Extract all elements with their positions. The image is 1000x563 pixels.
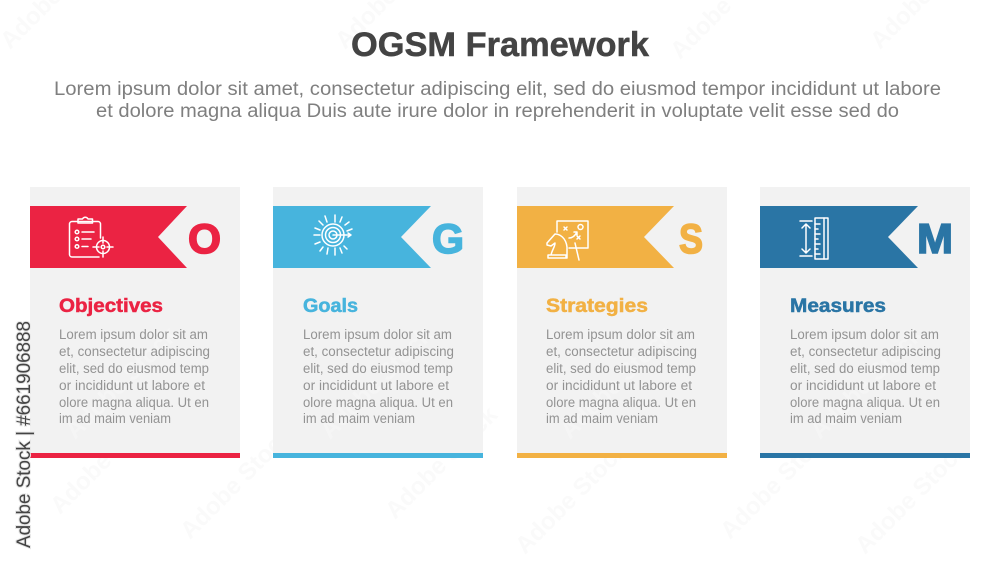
body: measures: or incididunt ut labore et bbox=[790, 378, 936, 393]
body: measures: Lorem ipsum dolor sit am bbox=[790, 327, 939, 342]
bottom bar: objectives bbox=[30, 453, 240, 458]
body: strategies: elit, sed do eiusmod temp bbox=[546, 361, 696, 376]
intro text: et dolore magna aliqua Duis aute irure dolor in reprehenderit in voluptate velit esse sed do bbox=[96, 101, 899, 122]
stock image watermarks: Adobe Stock bbox=[45, 396, 168, 519]
panel watermark: goals: Adobe Stock bbox=[315, 321, 438, 444]
body: measures bbox=[790, 327, 941, 426]
heading: goals: Goals bbox=[303, 296, 358, 317]
body: measures: olore magna aliqua. Ut en bbox=[790, 395, 940, 410]
title: OGSM Framework bbox=[351, 26, 649, 64]
body: goals: elit, sed do eiusmod temp bbox=[303, 361, 453, 376]
body: measures: elit, sed do eiusmod temp bbox=[790, 361, 940, 376]
body: strategies: olore magna aliqua. Ut en bbox=[546, 395, 696, 410]
body: measures: et, consectetur adipiscing bbox=[790, 344, 941, 359]
ribbon: objectives bbox=[30, 206, 187, 268]
letter S: S bbox=[679, 215, 703, 262]
body: goals: et, consectetur adipiscing bbox=[303, 344, 454, 359]
body: goals: or incididunt ut labore et bbox=[303, 378, 449, 393]
icon: clipboard with target bbox=[70, 217, 113, 257]
body: strategies: im ad maim veniam bbox=[546, 411, 658, 426]
panel watermark: objectives: Adobe Stock bbox=[60, 321, 183, 444]
body: objectives: or incididunt ut labore et bbox=[59, 378, 205, 393]
body: strategies: Lorem ipsum dolor sit am bbox=[546, 327, 695, 342]
bottom bar: goals bbox=[273, 453, 483, 458]
bottom bar: strategies bbox=[517, 453, 727, 458]
panel: strategies bbox=[517, 187, 727, 458]
letter M: M bbox=[917, 215, 953, 262]
icon: chess knight and board bbox=[547, 221, 588, 260]
body: goals: Lorem ipsum dolor sit am bbox=[303, 327, 452, 342]
panel: measures bbox=[760, 187, 970, 458]
icon: ruler with height arrow bbox=[800, 218, 828, 259]
stock image watermarks: Adobe Stock bbox=[715, 421, 838, 544]
body: objectives: et, consectetur adipiscing bbox=[59, 344, 210, 359]
heading: objectives: Objectives bbox=[59, 296, 163, 317]
ribbon: strategies bbox=[517, 206, 674, 268]
vertical stock id label: Adobe Stock | #661906888 bbox=[14, 321, 35, 548]
body: strategies: or incididunt ut labore et bbox=[546, 378, 692, 393]
body: objectives: olore magna aliqua. Ut en bbox=[59, 395, 209, 410]
body: measures: im ad maim veniam bbox=[790, 411, 902, 426]
ribbon: measures bbox=[760, 206, 918, 268]
body: goals bbox=[303, 327, 454, 426]
body: objectives: elit, sed do eiusmod temp bbox=[59, 361, 209, 376]
body: strategies: et, consectetur adipiscing bbox=[546, 344, 697, 359]
icon: target with rays bbox=[314, 215, 352, 255]
stock image watermarks: Adobe Stock bbox=[175, 421, 298, 544]
body: objectives: Lorem ipsum dolor sit am bbox=[59, 327, 208, 342]
letter G: G bbox=[432, 215, 464, 262]
body: objectives bbox=[59, 327, 210, 426]
panel: goals bbox=[273, 187, 483, 458]
heading: measures: Measures bbox=[790, 296, 886, 317]
panel watermark: strategies: Adobe Stock bbox=[555, 321, 678, 444]
heading: strategies: Strategies bbox=[546, 296, 648, 317]
body: goals: im ad maim veniam bbox=[303, 411, 415, 426]
letter O: O bbox=[188, 215, 221, 262]
body: goals: olore magna aliqua. Ut en bbox=[303, 395, 453, 410]
stock image watermarks: Adobe Stock bbox=[850, 436, 973, 559]
ribbon: goals bbox=[273, 206, 431, 268]
body: objectives: im ad maim veniam bbox=[59, 411, 171, 426]
body: strategies bbox=[546, 327, 697, 426]
bottom bar: measures bbox=[760, 453, 970, 458]
intro text bbox=[54, 79, 941, 122]
panel: objectives bbox=[30, 187, 240, 458]
stock image watermarks: Adobe Stock bbox=[510, 436, 633, 559]
intro text: Lorem ipsum dolor sit amet, consectetur adipiscing elit, sed do eiusmod tempor incididunt ut labore bbox=[54, 79, 941, 100]
panel watermark: measures: Adobe Stock bbox=[805, 321, 928, 444]
stock image watermarks: Adobe Stock bbox=[380, 401, 503, 524]
